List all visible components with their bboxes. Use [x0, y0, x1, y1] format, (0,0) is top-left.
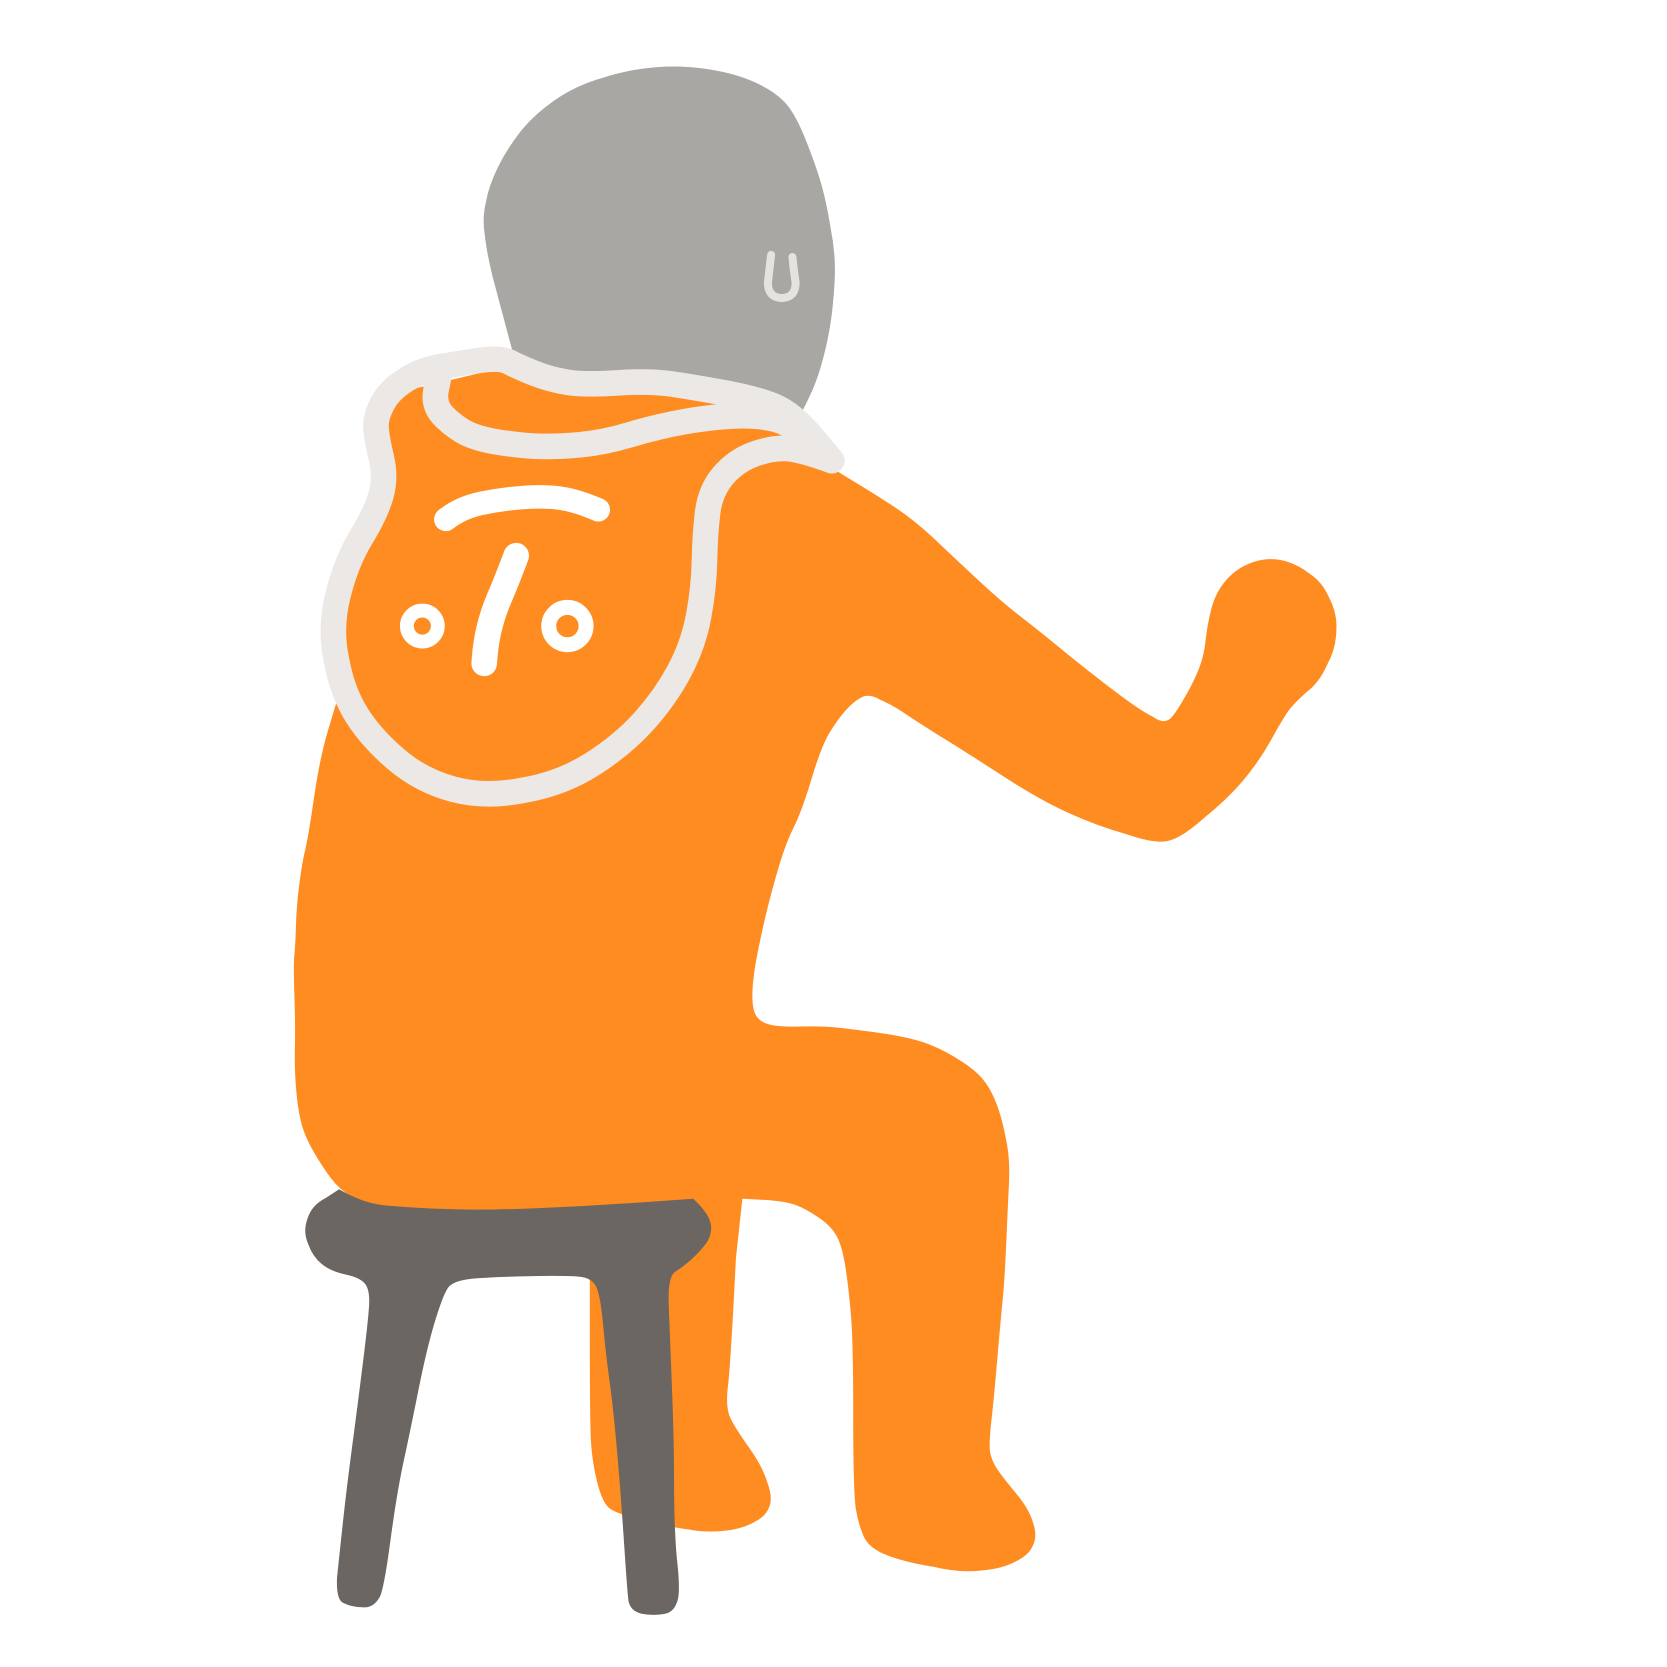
- back markings: [407, 497, 598, 663]
- inner collar loop: [435, 373, 821, 448]
- collar: hood strap and bib outline: [333, 359, 832, 794]
- body: torso, arm and front leg: [294, 368, 1336, 1571]
- right ring: [549, 607, 586, 645]
- icon: ear: [768, 255, 796, 298]
- head: [484, 66, 835, 427]
- back leg: [590, 1189, 771, 1532]
- left ring: [407, 611, 438, 642]
- slash stroke: [484, 556, 516, 663]
- stool: [305, 1189, 711, 1615]
- bib outline: [333, 359, 832, 794]
- brow stroke: [446, 497, 598, 519]
